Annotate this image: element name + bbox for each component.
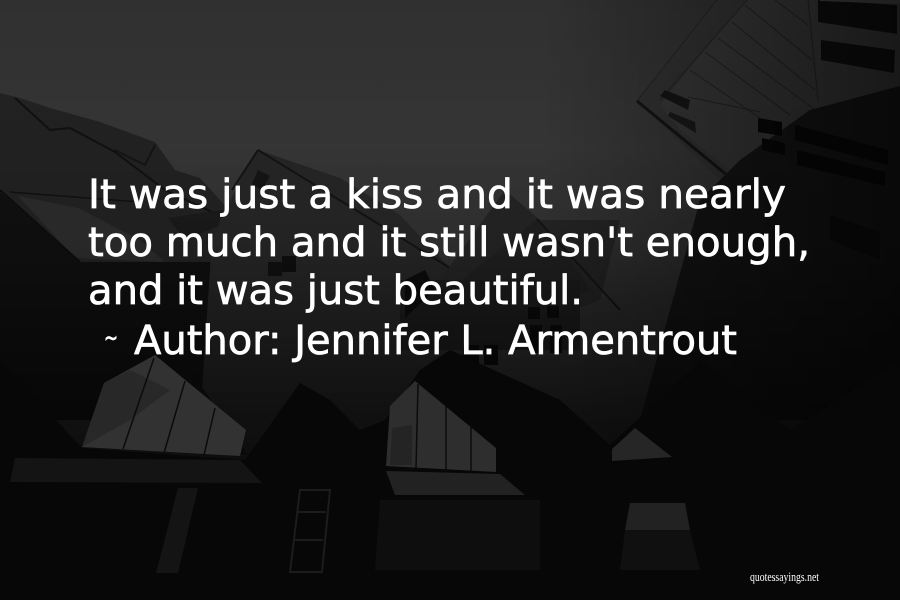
background: central house with gabled roof xyxy=(168,150,620,420)
center porch roof xyxy=(386,471,525,495)
background: left roof building xyxy=(0,93,250,420)
watermark: quotessayings.net xyxy=(750,569,819,584)
background: lower building mass xyxy=(0,350,900,600)
author line: ~ xyxy=(104,324,118,352)
quote text: too much and it still wasn't enough, xyxy=(88,220,810,266)
center gabled window xyxy=(386,381,496,472)
background: top right building facade xyxy=(637,0,900,190)
lower doors and windows xyxy=(156,488,700,573)
quote text: and it was just beautiful. xyxy=(88,268,583,314)
small right gable window xyxy=(612,428,672,461)
author line: Author: Jennifer L. Armentrout xyxy=(134,318,737,364)
left gabled window xyxy=(82,355,246,456)
background: right dark block with windows xyxy=(640,86,900,420)
background: central windows row xyxy=(268,262,580,365)
quote text: It was just a kiss and it was nearly xyxy=(88,172,786,218)
quote text xyxy=(88,172,810,314)
left porch roof xyxy=(10,458,262,483)
